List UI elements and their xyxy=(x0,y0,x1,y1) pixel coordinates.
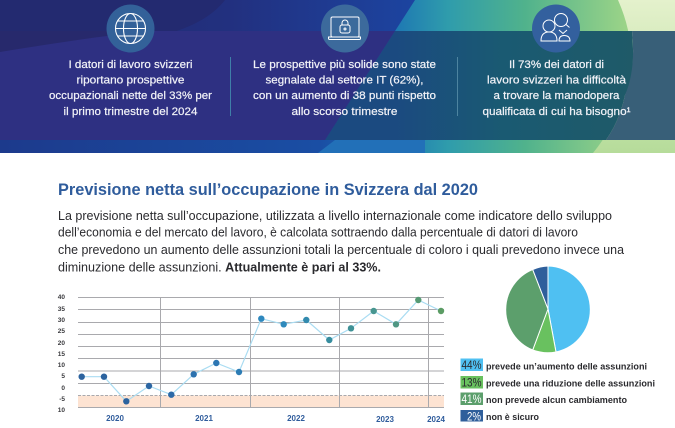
text: stat 1: il primo trimestre del 2024 xyxy=(64,106,198,118)
legend item: decrease xyxy=(460,376,655,390)
text: stat 2: segnalate dal settore IT (62%), xyxy=(266,74,424,86)
axis labels: -5 xyxy=(59,396,65,403)
text: stat 3: qualificata di cui ha bisogno¹ xyxy=(482,106,631,118)
panel: stat 2 IT sector xyxy=(253,4,436,118)
axis labels: 35 xyxy=(58,306,65,313)
text block: description: che prevedono un aumento delle assunzioni totali la percentuale di coloro i quali prevedono invece una xyxy=(58,243,624,257)
text: stat 3 xyxy=(482,59,631,118)
text: stat 2 xyxy=(253,59,436,118)
text block: description: diminuzione delle assunzioni. Attualmente è pari al 33%. xyxy=(58,260,381,274)
text: stat 2: Le prospettive più solide sono state xyxy=(253,59,436,71)
panel: stat 3 skilled labour shortage xyxy=(482,4,631,118)
legend item: no change: non prevede alcun cambiamento xyxy=(486,395,627,406)
axis labels: 30 xyxy=(58,317,65,324)
axis labels: 20 xyxy=(58,340,65,347)
data points xyxy=(78,297,444,404)
text: stat 1: occupazionali nette del 33% per xyxy=(49,90,212,102)
text: stat 2: allo scorso trimestre xyxy=(292,106,398,118)
text: stat 1: I datori di lavoro svizzeri xyxy=(68,59,192,71)
panel: header banner xyxy=(0,0,675,153)
panel: stat 1 employers outlook xyxy=(49,4,212,118)
year labels: 2023 xyxy=(376,415,394,424)
axis labels xyxy=(58,294,65,414)
legend item: not sure: non è sicuro xyxy=(486,412,539,423)
pie chart xyxy=(506,266,590,353)
axis labels: 25 xyxy=(58,328,65,335)
legend item: no change: 41% xyxy=(462,392,482,406)
legend xyxy=(460,358,655,424)
text block: description: La previsione netta sull’occupazione, utilizzata a livello internazionale come indicatore dello sviluppo xyxy=(58,209,612,223)
legend item: no change xyxy=(460,392,627,406)
axis labels: 15 xyxy=(58,351,65,358)
year labels xyxy=(106,414,445,424)
legend item: increase xyxy=(460,358,647,372)
text: stat 3: Il 73% dei datori di xyxy=(509,59,604,71)
text: stat 3: lavoro svizzeri ha difficoltà xyxy=(487,74,627,86)
axis labels: 5 xyxy=(61,373,65,380)
legend item: not sure xyxy=(460,410,539,424)
legend item: increase: 44% xyxy=(462,358,482,372)
icon: globe xyxy=(106,4,154,52)
icon: laptop with lock xyxy=(321,4,369,52)
legend item: not sure: 2% xyxy=(467,410,481,424)
axis labels: 0 xyxy=(61,385,65,392)
text: stat 1 xyxy=(49,59,212,118)
legend item: decrease: prevede una riduzione delle assunzioni xyxy=(486,378,655,390)
text: stat 1: riportano prospettive xyxy=(76,74,184,86)
axis labels: 40 xyxy=(58,294,65,301)
heading: Previsione netta sull’occupazione in Svizzera dal 2020 xyxy=(58,180,478,199)
year labels: 2022 xyxy=(287,414,305,423)
data line xyxy=(82,300,441,401)
text: stat 2: con un aumento di 38 punti rispetto xyxy=(253,90,436,102)
year labels: 2021 xyxy=(195,414,213,423)
year labels: 2024 xyxy=(427,415,445,424)
line chart: net employment outlook xyxy=(58,294,445,424)
legend item: decrease: 13% xyxy=(462,376,482,390)
axis labels: 10 xyxy=(58,362,65,369)
year labels: 2020 xyxy=(106,414,124,423)
text block: description xyxy=(58,209,624,274)
legend item: increase: prevede un’aumento delle assunzioni xyxy=(486,362,647,372)
text block: description: dell’economia e del mercato del lavoro, è calcolata sottraendo dalla percentuale di datori di lavoro xyxy=(58,226,578,240)
icon: people with magnifier xyxy=(532,4,580,52)
text: stat 3: a trovare la manodopera xyxy=(494,90,620,102)
axis labels: 10 xyxy=(58,407,65,414)
